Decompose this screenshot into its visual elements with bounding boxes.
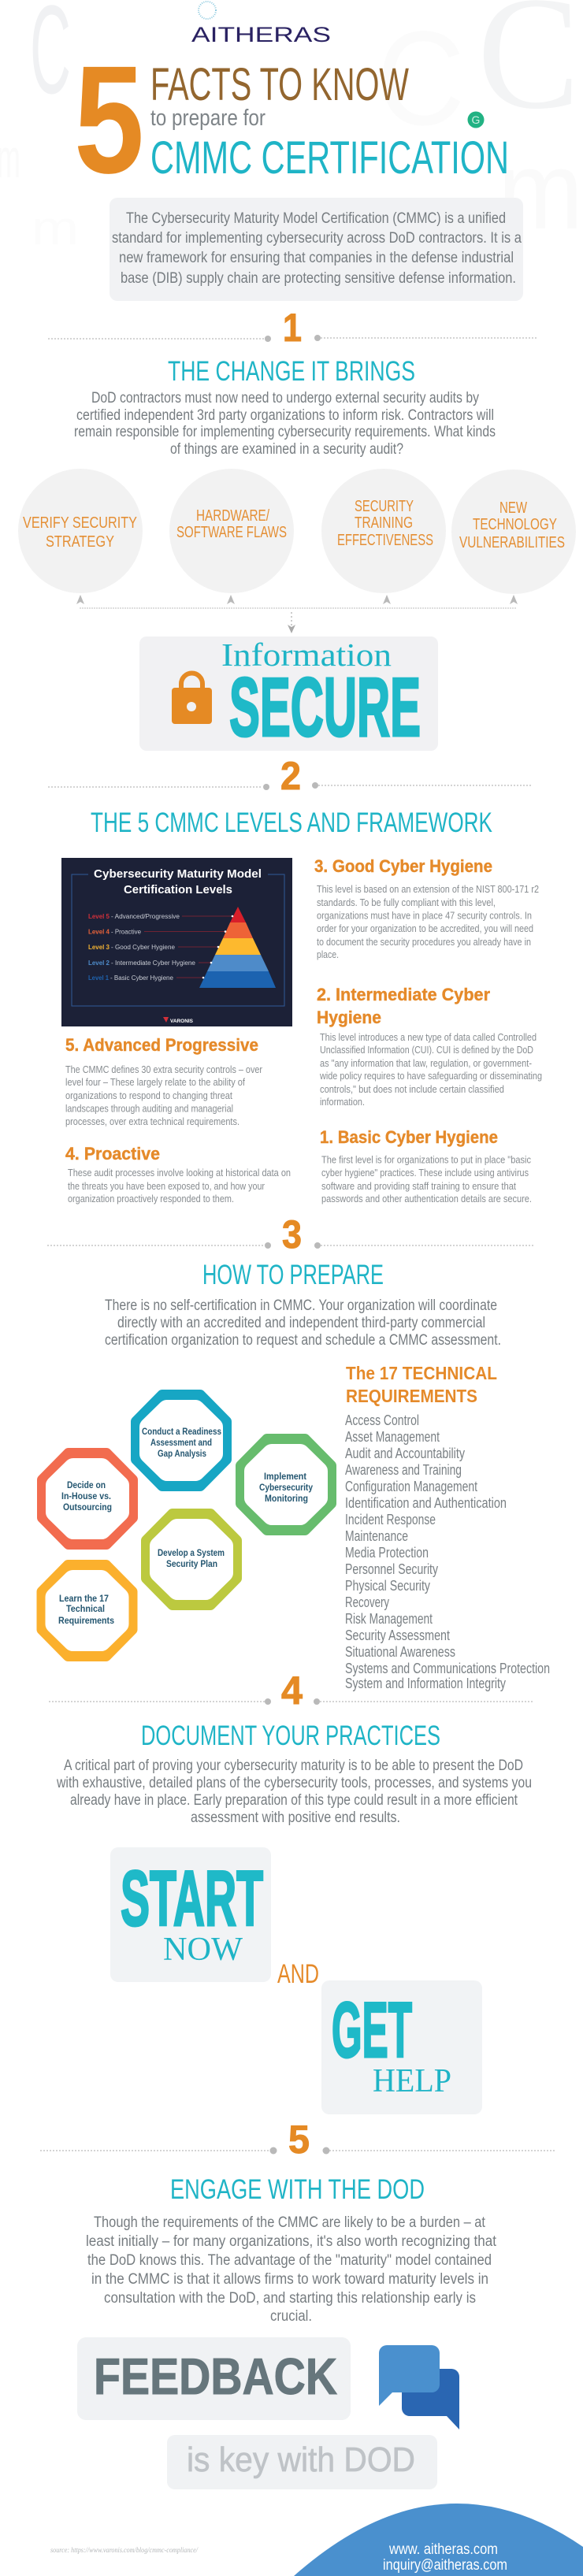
chart title: Cybersecurity Maturity Model [94, 867, 262, 881]
text block: engage intro: the DoD knows this. The advantage of the "maturity" model contained [87, 2252, 492, 2269]
level 2 description: controls," but does not include certain classified [320, 1083, 504, 1095]
list items: Recovery [345, 1594, 389, 1610]
step: decide on in-house vs outsourcing: Decide on [67, 1481, 106, 1490]
level 1 description: software and providing staff training to ensure that [321, 1180, 516, 1192]
background watermark letters: m [32, 202, 79, 254]
icon: padlock [172, 673, 212, 724]
panel: is key with DoD [167, 2435, 437, 2489]
text block: engage intro: consultation with the DoD, and starting this relationship early is [104, 2290, 476, 2307]
step: conduct a readiness assessment: Assessment and [150, 1438, 212, 1448]
circle: security training effectiveness: TRAINING [355, 514, 413, 532]
level 2 description: as "any information that law, regulation, or government- [320, 1057, 532, 1069]
text block: change intro: of things are examined in a security audit? [170, 441, 403, 458]
text block: engage intro: least initially – for many organizations, it's also worth recognizing that [86, 2233, 497, 2250]
level 2 description: information. [320, 1096, 365, 1108]
icon: speech bubbles [379, 2345, 459, 2429]
level 2 description: Hygiene [317, 1008, 381, 1027]
heading: engage with the DoD: ENGAGE WITH THE DOD [170, 2174, 425, 2205]
footer: contact details: inquiry@aitheras.com [383, 2557, 507, 2574]
panel: get help: GET [332, 1986, 412, 2073]
list heading [346, 1363, 497, 1406]
panel: get help: HELP [373, 2063, 451, 2099]
text block: how to prepare intro: directly with an accredited and independent third-party commercial [117, 1315, 485, 1331]
level 5 description: 5. Advanced Progressive [65, 1035, 258, 1055]
level labels: Level 1 [88, 974, 110, 982]
step: implement cybersecurity monitoring: Cybersecurity [259, 1483, 314, 1493]
text block: change intro [74, 390, 496, 458]
circle: verify security strategy [18, 469, 143, 593]
level 4 description: These audit processes involve looking at historical data on [68, 1167, 291, 1179]
level 5 description: organizations to respond to changing threat [65, 1089, 232, 1101]
circle: security training effectiveness: SECURITY [355, 498, 414, 515]
level 4 description [65, 1144, 291, 1204]
step: learn the 17 technical requirements [43, 1565, 132, 1656]
level 3 description: organizations must have in place 47 security controls. In [317, 909, 532, 922]
list heading: The 17 TECHNICAL [346, 1363, 497, 1383]
step: learn the 17 technical requirements: Requirements [58, 1616, 114, 1626]
list items: Situational Awareness [345, 1644, 455, 1660]
step: learn the 17 technical requirements: Learn the 17 [59, 1594, 109, 1604]
list items: Security Assessment [345, 1628, 450, 1643]
list items: Asset Management [345, 1429, 440, 1445]
step: develop a system security plan: Security Plan [166, 1560, 217, 1569]
level labels: Level 4 [88, 928, 110, 936]
label: and: AND [277, 1959, 319, 1989]
text block: how to prepare intro: There is no self-certification in CMMC. Your organization will coordinate [105, 1297, 497, 1314]
level 2 description: Unclassified Information (CUI). CUI is defined by the DoD [320, 1044, 533, 1056]
source logo: Varonis: VARONIS [170, 1019, 193, 1024]
level labels: - Intermediate Cyber Hygiene [111, 960, 196, 967]
source note: source: https://www.varonis.com/blog/cmmc-compliance/ [50, 2546, 199, 2554]
chart: CMMC levels pyramid: Certification Levels [124, 883, 232, 896]
chart: CMMC levels pyramid [61, 858, 292, 1026]
circle: security training effectiveness [321, 469, 446, 593]
text block: engage intro: Though the requirements of the CMMC are likely to be a burden – at [94, 2214, 486, 2231]
list items: Access Control [345, 1412, 419, 1428]
level labels: Level 3 [88, 944, 110, 951]
panel: intro: base (DIB) supply chain are protecting sensitive defense information. [121, 270, 516, 287]
level 3 description: This level is based on an extension of the NIST 800-171 r2 [317, 883, 539, 895]
icon: dotted logo ring [199, 2, 216, 19]
panel: intro: standard for implementing cybersecurity across DoD contractors. It is a [112, 230, 522, 247]
level labels: - Proactive [111, 928, 142, 936]
title line: to prepare for: to prepare for [150, 106, 266, 131]
source logo: Varonis [163, 1017, 193, 1024]
text block: change intro: DoD contractors must now need to undergo external security audits by [91, 390, 479, 406]
text block: engage intro [86, 2214, 497, 2325]
text block: change intro: certified independent 3rd party organizations to inform risk. Contractors will [76, 407, 494, 424]
level 4 description: organization proactively responded to them. [68, 1193, 234, 1204]
circle: new technology vulnerabilities [451, 470, 576, 594]
circle: new technology vulnerabilities: TECHNOLOGY [473, 516, 557, 533]
text block: document intro: assessment with positive end results. [191, 1810, 400, 1826]
level 4 description: the threats you have been exposed to, and how your [68, 1180, 266, 1192]
logo wordmark: AITHERAS [191, 23, 331, 46]
label: secure: SECURE [229, 661, 421, 754]
level 3 description: standards. To be fully compliant with this level, [317, 896, 496, 908]
level 2 description: 2. Intermediate Cyber [317, 985, 490, 1004]
circle: new technology vulnerabilities: NEW [499, 499, 527, 517]
list items: Maintenance [345, 1528, 408, 1544]
heading: how to prepare: HOW TO PREPARE [202, 1260, 384, 1290]
section divider 3 [48, 1212, 536, 1256]
level 1 description: 1. Basic Cyber Hygiene [320, 1127, 498, 1147]
text block: how to prepare intro: certification organization to request and schedule a CMMC assessment. [105, 1332, 501, 1349]
step: implement cybersecurity monitoring: Implement [264, 1472, 306, 1482]
level 3 description: 3. Good Cyber Hygiene [314, 856, 492, 876]
step: learn the 17 technical requirements: Technical [66, 1605, 105, 1614]
list items: Risk Management [345, 1611, 433, 1627]
panel: intro: new framework for ensuring that companies in the defense industrial [119, 250, 514, 266]
label: information: Information [221, 637, 392, 673]
section divider 1 [49, 306, 537, 350]
level 5 description: level four – These largely relate to the ability of [65, 1076, 245, 1088]
text block: engage intro: crucial. [270, 2308, 312, 2325]
text block: how to prepare intro [105, 1297, 501, 1349]
section divider 3: 3 [282, 1212, 302, 1256]
level 2 description: This level introduces a new type of data called Controlled [320, 1031, 537, 1043]
step: develop a system security plan [147, 1514, 236, 1605]
section divider 5: 5 [288, 2118, 310, 2162]
step: decide on in-house vs outsourcing: Outsourcing [63, 1503, 112, 1513]
panel: is key with DoD: is key with DOD [187, 2441, 415, 2479]
section divider 4 [50, 1668, 535, 1713]
panel: feedback [77, 2337, 351, 2420]
level labels: Level 5 [88, 913, 110, 920]
level labels [88, 913, 196, 982]
list: the 17 technical requirements [345, 1363, 550, 1691]
section divider 1: 1 [283, 306, 302, 350]
list items: System and Information Integrity [345, 1676, 506, 1691]
level 5 description: landscapes through auditing and managerial [65, 1103, 233, 1114]
level 1 description: cyber hygiene" practices. These include using antivirus [321, 1167, 529, 1179]
section divider 4: 4 [281, 1668, 303, 1713]
level labels: - Advanced/Progressive [111, 913, 180, 920]
section divider 2: 2 [280, 754, 301, 798]
background watermark letters [0, 0, 583, 254]
circle: hardware software flaws: SOFTWARE FLAWS [176, 524, 287, 541]
icon: green G badge [468, 112, 484, 128]
level 3 description: place. [317, 948, 339, 960]
panel: intro [110, 198, 523, 301]
step: decide on in-house vs outsourcing [43, 1453, 132, 1544]
panel: get help [321, 1980, 482, 2114]
heading: document your practices: DOCUMENT YOUR PRACTICES [141, 1720, 440, 1751]
level 1 description: passwords and other authentication details are secure. [321, 1193, 532, 1204]
level 1 description [320, 1127, 532, 1204]
circle: security training effectiveness: EFFECTIVENESS [337, 532, 433, 549]
panel: information secure [139, 637, 438, 754]
level 5 description: processes, over extra technical requirements. [65, 1115, 240, 1127]
level 3 description: order for your organization to be accredited, you will need [317, 922, 533, 934]
level labels: - Basic Cyber Hygiene [110, 974, 174, 982]
step: conduct a readiness assessment [136, 1395, 226, 1486]
list items: Configuration Management [345, 1479, 477, 1494]
list items [345, 1412, 550, 1691]
panel: start now: NOW [163, 1932, 243, 1968]
step: conduct a readiness assessment: Gap Analysis [158, 1449, 206, 1459]
title line: facts to know: FACTS TO KNOW [150, 59, 409, 110]
step: develop a system security plan: Develop a System [158, 1549, 225, 1558]
heading: the change it brings: THE CHANGE IT BRINGS [168, 356, 415, 387]
footer: contact details: www. aitheras.com [388, 2541, 498, 2558]
circle: verify security strategy: STRATEGY [46, 533, 114, 551]
panel: intro: The Cybersecurity Maturity Model Certification (CMMC) is a unified [126, 210, 506, 227]
list items: Identification and Authentication [345, 1495, 507, 1511]
text block: document intro [56, 1758, 532, 1826]
logo: Aitheras [191, 2, 331, 46]
list items: Audit and Accountability [345, 1446, 465, 1461]
panel: feedback: FEEDBACK [94, 2348, 337, 2405]
title numeral 5: 5 [74, 34, 144, 206]
list items: Media Protection [345, 1545, 429, 1561]
level labels: - Good Cyber Hygiene [111, 944, 176, 951]
text block: engage intro: in the CMMC is that it allows firms to work toward maturity levels in [91, 2271, 488, 2288]
level 5 description: The CMMC defines 30 extra security controls – over [65, 1063, 263, 1075]
step: implement cybersecurity monitoring [241, 1439, 331, 1530]
section divider 5 [41, 2118, 557, 2162]
background watermark letters: C [377, 4, 465, 154]
level 3 description [314, 856, 539, 960]
list items: Awareness and Training [345, 1462, 462, 1478]
arrows: audit connector [76, 595, 518, 633]
level 3 description: to document the security procedures you already have in [317, 936, 531, 948]
level 2 description [317, 985, 542, 1108]
list items: Incident Response [345, 1512, 436, 1527]
step: decide on in-house vs outsourcing: In-House vs. [61, 1492, 111, 1501]
circle: hardware software flaws: HARDWARE/ [196, 507, 269, 525]
level 1 description: The first level is for organizations to put in place "basic [321, 1153, 531, 1166]
footer: contact details [294, 2504, 583, 2576]
circle: hardware software flaws [169, 469, 294, 593]
list items: Personnel Security [345, 1561, 438, 1577]
level leader lines [144, 916, 232, 978]
title [74, 34, 509, 206]
step: conduct a readiness assessment: Conduct a Readiness [142, 1427, 221, 1437]
panel: start now: START [121, 1854, 263, 1942]
level 2 description: wide policy requires to have safeguarding or disseminating [319, 1070, 542, 1082]
panel: start now [110, 1847, 271, 1982]
section divider 2 [49, 754, 532, 798]
icon: green G badge: G [471, 113, 480, 126]
level 4 description: 4. Proactive [65, 1144, 160, 1164]
text block: change intro: remain responsible for implementing cybersecurity requirements. What kinds [74, 424, 496, 440]
level 5 description [65, 1035, 263, 1127]
circle: verify security strategy: VERIFY SECURITY [23, 514, 137, 532]
list items: Physical Security [345, 1578, 430, 1594]
level labels: Level 2 [88, 960, 110, 967]
pyramid bands [199, 907, 276, 988]
step: implement cybersecurity monitoring: Monitoring [265, 1494, 308, 1504]
list heading: REQUIREMENTS [346, 1386, 477, 1406]
